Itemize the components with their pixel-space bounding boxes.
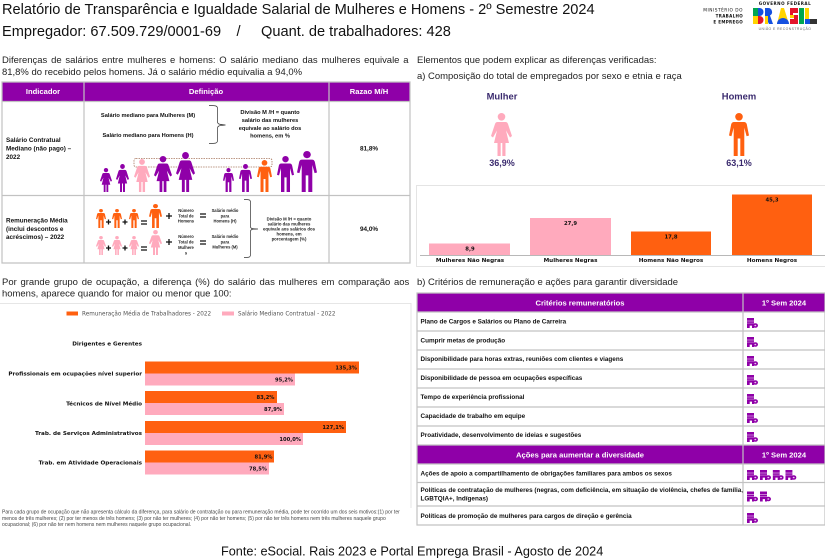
- row 1 formula text: Salário mediano para Mulheres (M): [101, 113, 195, 119]
- logo: ministry and federal government: [703, 1, 817, 31]
- row 2 pictogram formula: Mulheres (M): [212, 244, 238, 250]
- bars: Profissionais: [145, 362, 359, 386]
- intro text: salary differences: 81,8% do recebido pelos homens. Já o salário médio equivalia a 94,0%: [2, 67, 303, 78]
- footnote: [2, 510, 400, 528]
- actions header: [417, 445, 825, 464]
- bars: Operacionais: 78,5%: [249, 466, 268, 472]
- row 2 pictogram formula: [96, 200, 316, 258]
- employer line: /: [236, 24, 242, 40]
- bars: Operacionais: 81,9%: [254, 454, 273, 460]
- bars: Técnicos: 87,9%: [264, 407, 283, 413]
- criteria rows: Proatividade, desenvolvimento de ideias e sugestões: [420, 432, 582, 439]
- category labels: [8, 342, 143, 467]
- chart legend: Salário Mediano Contratual - 2022: [238, 310, 336, 318]
- footnote: ocupacional; (6) por não ter nem homens nem mulheres naquele grupo ocupacional.: [2, 522, 191, 528]
- bars: Administrativos: 127,1%: [322, 425, 345, 431]
- row 2 pictogram formula: homens, em: [276, 231, 302, 236]
- row 2 pictogram formula: porcentagem (%): [272, 236, 307, 241]
- row 2 pictogram formula: Salário médio: [212, 234, 239, 239]
- section b heading: b) Critérios de remuneração e ações para garantir diversidade: [417, 277, 678, 288]
- table header: Razao M/H: [350, 87, 388, 96]
- category labels: Trab. em Atividade Operacionais: [39, 461, 143, 467]
- row 1 label: Mediano (não pago) –: [6, 146, 72, 152]
- logo: ministry and federal government: GOVERNO FEDERAL: [759, 1, 811, 6]
- occupation paragraph: homens, aparece quando for maior ou menor que 100:: [2, 288, 232, 300]
- composition bar chart: Mulheres Não Negras: [436, 258, 505, 264]
- row 1 ratio: 81,8%: [360, 146, 378, 152]
- bars: Profissionais: 95,2%: [275, 378, 294, 384]
- source line: Fonte: eSocial. Rais 2023 e Portal Emprega Brasil - Agosto de 2024: [221, 544, 603, 558]
- occupation paragraph: [2, 277, 410, 300]
- row 1 formula text: equivale ao salário dos: [239, 126, 301, 132]
- criteria rows: Plano de Cargos e Salários ou Plano de Carreira: [420, 318, 567, 326]
- bars: Administrativos: [145, 421, 346, 445]
- actions rows: Políticas de contratação de mulheres (negras, com deficiência, em situação de violência, chefes de família,: [420, 487, 743, 494]
- criteria rows: Disponibilidade para horas extras, reuniões com clientes e viagens: [420, 356, 624, 363]
- occupation paragraph: Por grande grupo de ocupação, a diferença (%) do salário das mulheres em comparação aos: [2, 277, 410, 288]
- row 2 ratio: 94,0%: [360, 226, 378, 233]
- actions rows: Ações de apoio a compartilhamento de obrigações familiares para ambos os sexos: [420, 470, 672, 478]
- table header: [2, 82, 410, 101]
- composition bar chart: [416, 186, 825, 266]
- bars: Técnicos: 83,2%: [256, 395, 275, 401]
- table header: Indicador: [26, 87, 60, 96]
- criteria and actions table: [417, 293, 825, 525]
- row 2 pictogram formula: Salário médio: [212, 208, 239, 213]
- category labels: Trab. de Serviços Administrativos: [35, 431, 143, 437]
- chart legend: Remuneração Média de Trabalhadores - 2022: [82, 310, 211, 318]
- row 2 label: acréscimos) – 2022: [6, 234, 65, 241]
- actions rows: Políticas de promoção de mulheres para cargos de direção e gerência: [420, 513, 632, 520]
- composition bar chart: Mulheres Negras: [544, 258, 598, 264]
- actions header: Ações para aumentar a diversidade: [516, 450, 644, 460]
- logo: ministry and federal government: E EMPREGO: [713, 19, 743, 24]
- actions icons: [747, 470, 796, 523]
- woman share: Mulher: [487, 90, 518, 102]
- row 2 label: [6, 218, 68, 241]
- row 2 pictogram formula: s: [185, 250, 188, 255]
- footnote: menos de três mulheres; (2) por ter menos de três homens; (3) por não ter mulheres; (4) por não ter homens; (5) por não ter três homens nem três mulheres naquele grupo: [2, 516, 386, 522]
- elements heading: Elementos que podem explicar as diferenças verificadas:: [417, 55, 656, 66]
- footnote: Para cada grupo de ocupação que não apresenta cálculo da diferença, para salário de contratação ou para remuneração média, pode ter ocorrido um dos seis motivos:(1) por ter: [2, 510, 400, 516]
- criteria icons: [747, 318, 758, 442]
- criteria header: Critérios remuneratórios: [535, 298, 625, 308]
- bars: Operacionais: [145, 450, 274, 474]
- section a heading: a) Composição do total de empregados por sexo e etnia e raça: [417, 71, 682, 82]
- criteria rows: Cumprir metas de produção: [420, 338, 505, 344]
- row 2 pictogram formula: Total de: [178, 239, 194, 244]
- man share: 63,1%: [726, 158, 752, 168]
- row 1 label: [6, 137, 72, 161]
- category labels: Dirigentes e Gerentes: [72, 342, 143, 348]
- row 1 formula text: salário das mulheres: [242, 118, 298, 124]
- criteria header: 1º Sem 2024: [762, 298, 807, 308]
- employer line: Quant. de trabalhadores: 428: [261, 24, 451, 40]
- intro text: salary differences: Diferenças de salários entre mulheres e homens: O salário mediano das mulheres equivale a: [2, 55, 409, 66]
- logo: ministry and federal government: MINISTÉRIO DO: [703, 6, 743, 14]
- man share: [722, 90, 756, 168]
- row 2 pictogram formula: Divisão M /H = quanto: [267, 216, 312, 221]
- row 2 label: (inclui descontos e: [6, 226, 64, 233]
- row 2 pictogram formula: Homens: [178, 218, 195, 223]
- criteria rows: [420, 318, 624, 439]
- composition bar chart: 27,9: [564, 221, 577, 227]
- row 1 label: 2022: [6, 154, 21, 161]
- row 2 pictogram formula: Número: [178, 208, 194, 213]
- occupation bar chart: [0, 304, 411, 508]
- composition bar chart: Homens Não Negros: [639, 258, 704, 264]
- logo: ministry and federal government: UNIÃO E RECONSTRUÇÃO: [759, 26, 811, 31]
- actions header: 1º Sem 2024: [762, 450, 807, 460]
- man share: Homem: [722, 90, 756, 102]
- bars: Profissionais: 135,3%: [335, 366, 358, 372]
- criteria rows: Tempo de experiência profissional: [420, 394, 525, 401]
- row 1 label: Salário Contratual: [6, 137, 61, 144]
- row 2 pictogram formula: Total de: [178, 213, 194, 218]
- row 1 formula text: homens, em %: [250, 134, 290, 140]
- bars: Administrativos: 100,0%: [279, 437, 302, 443]
- row 2 pictogram formula: Número: [178, 234, 194, 239]
- row 1 formula text: Salário mediano para Homens (H): [102, 133, 194, 139]
- actions rows: [420, 470, 743, 520]
- woman share: 36,9%: [489, 158, 515, 168]
- criteria rows: Disponibilidade de pessoa em ocupações específicas: [420, 375, 583, 382]
- row 2 pictogram formula: para: [221, 213, 230, 218]
- row 2 pictogram formula: equivale aos salários dos: [263, 226, 316, 231]
- row 2 label: Remuneração Média: [6, 218, 68, 224]
- category labels: Profissionais em ocupações nível superior: [8, 370, 142, 378]
- row 2 pictogram formula: salário das mulheres: [268, 221, 311, 226]
- row 1 people pictogram: [100, 151, 317, 192]
- composition bar chart: Homens Negros: [747, 258, 798, 264]
- composition bar chart: 8,9: [465, 246, 475, 252]
- row 2 pictogram formula: para: [221, 239, 230, 244]
- actions rows: LGBTQIA+, Indígenas): [420, 496, 488, 502]
- row 2 pictogram formula: Mulhere: [178, 245, 195, 250]
- intro text: salary differences: [2, 55, 409, 78]
- criteria rows: Capacidade de trabalho em equipe: [420, 413, 526, 420]
- row 1 formula text: Divisão M /H = quanto: [240, 110, 300, 116]
- employer line: Empregador: 67.509.729/0001-69: [2, 24, 221, 40]
- title: Relatório de Transparência e Igualdade Salarial de Mulheres e Homens - 2º Semestre 2024: [2, 2, 595, 18]
- woman share: [487, 90, 518, 168]
- category labels: Técnicos de Nível Médio: [66, 400, 142, 408]
- logo: ministry and federal government: TRABALHO: [716, 13, 743, 18]
- row 2 pictogram formula: Homens (H): [214, 218, 237, 223]
- composition bar chart: 17,8: [664, 234, 678, 240]
- criteria header: [417, 293, 825, 312]
- chart legend: [66, 310, 336, 318]
- bars: Técnicos: [145, 391, 284, 415]
- composition bar chart: 45,3: [765, 198, 779, 204]
- table header: Definição: [189, 87, 223, 96]
- row 1 formula text: [101, 106, 301, 144]
